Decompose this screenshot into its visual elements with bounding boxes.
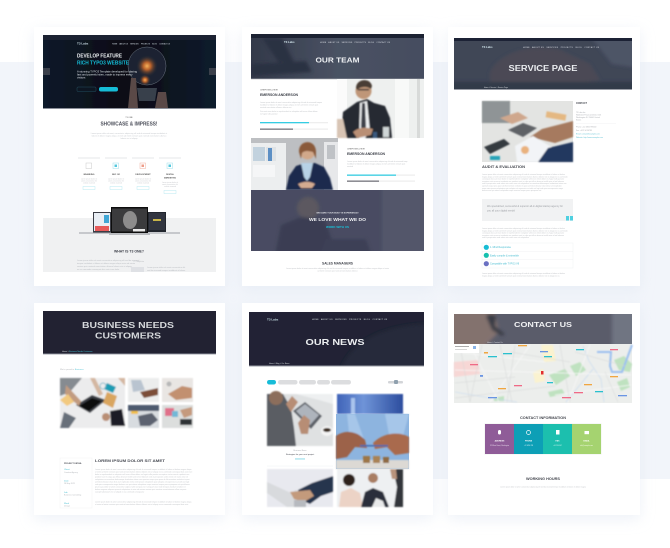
service text: magna aliqua ut enim ad minim veniam quis nostrud exercitation ullamco laboris nisi ut aliquip ex ea commodo xyxy=(482,175,568,178)
contact sidebar: T3 Labs Inc. xyxy=(576,112,586,114)
content text: architecto beatae vitae dicta sunt explicabo nemo enim ipsam voluptatem quia voluptas sit aspernatur aut odit aut fugit xyxy=(95,480,190,484)
content text: Lorem ipsum dolor sit amet consectetur adipiscing elit sed do eiusmod tempor incididunt ut labore et dolore magna aliqua xyxy=(95,500,191,504)
feature list: Easily compile & extensible xyxy=(490,254,520,257)
box: fax: FAX xyxy=(556,440,560,442)
team member: female executive text: CHIEF EXECUTIVE xyxy=(347,148,366,150)
page header: CONTACT US xyxy=(514,320,572,329)
section heading: SHOWCASE & IMPRESS! xyxy=(100,122,158,128)
page header: Home » Service » Service Page xyxy=(484,86,508,89)
section text: tempor incididunt ut labore et dolore magna aliqua enim ad minim xyxy=(77,262,135,265)
devices mockup xyxy=(79,207,180,235)
section text: Lorem ipsum dolor sit amet consectetur elit xyxy=(147,266,186,269)
hero banner: RICH TYPO3 WEBSITE xyxy=(77,60,130,66)
quote box: you all your digital needs! xyxy=(487,210,516,212)
content text: ut enim ad minim veniam quis nostrud exercitation ullamco laboris nisi ut aliquip ex ea commodo consequat duis aute irure xyxy=(95,470,192,474)
article caption: Strategies for your next project xyxy=(286,453,315,456)
photo: team at laptop xyxy=(60,378,125,428)
team member: male executive text: CHIEF EXECUTIVE xyxy=(260,90,279,92)
call to action band: WE LOVE WHAT WE DO xyxy=(309,217,367,222)
contact sidebar: Fax: +012 34 56789 xyxy=(576,130,592,132)
feature columns: amet consectetur elit xyxy=(108,180,124,182)
section text: T3 Template xyxy=(133,260,145,263)
feature columns: BRANDING xyxy=(84,173,95,176)
feature columns: Lorem ipsum dolor sit xyxy=(162,181,179,184)
hero text: A stunning TYPO3 Template developed for blazing xyxy=(77,70,137,74)
page header: HOME ABOUT US SERVICES PROJECTS BLOG CONTACT US xyxy=(320,41,391,44)
box: phone: PHONE xyxy=(525,440,533,442)
hero heading: DEVELOP FEATURE xyxy=(77,54,123,60)
filter pills xyxy=(267,380,403,384)
team member: female executive text: nostrud xyxy=(347,165,353,168)
photo: blue laboratory xyxy=(337,394,403,414)
content text: sed quia consequuntur magni dolores eos qui ratione voluptatem sequi nesciunt neque porro quisquam est qui dolorem xyxy=(95,483,190,486)
content text: dolor in reprehenderit in voluptate velit esse cillum dolore eu fugiat nulla pariatur excepteur sint occaecat cupidatat non xyxy=(95,473,189,476)
feature columns: sed do eiusmod xyxy=(110,182,122,184)
section text: labore et dolore magna aliqua ut enim ad minim veniam quis nostrud exercitation ullamco xyxy=(92,134,166,138)
feature columns: sed do eiusmod xyxy=(83,182,95,184)
photo: audit desk xyxy=(482,101,573,162)
hero banner: visitors xyxy=(77,76,86,80)
team member: male executive text: Lorem ipsum dolor sit amet consectetur adipiscing elit sed do eiusmod tempor xyxy=(260,101,322,104)
hero banner: HOME ABOUT US SERVICES PROJECTS BLOG CONTACT US xyxy=(112,42,171,46)
page header: T3 Labs xyxy=(284,40,295,44)
content text: Lorem ipsum dolor sit amet consectetur adipiscing elit sed do eiusmod tempor incididunt ut labore et dolore magna aliqua xyxy=(95,468,191,471)
hero buttons xyxy=(77,87,118,92)
section text: Lorem ipsum dolor sit amet consectetur adipiscing elit sed do eiusmod xyxy=(77,259,139,262)
feature list xyxy=(482,243,573,268)
card: contact template xyxy=(448,303,640,515)
project details sidebar: 28 May 2021 xyxy=(64,483,75,485)
feature list: Compatible with TYPO3 V9 xyxy=(490,263,520,266)
hero banner xyxy=(43,35,216,109)
feature columns: SEO 101 xyxy=(112,174,121,176)
page header: Home » Blog » Our News xyxy=(269,363,289,365)
feature columns: sed do eiusmod xyxy=(137,182,149,184)
content text: dolore magnam aliquam quaerat voluptatem ut enim ad minima veniam quis nostrum exercitationem ullam corporis xyxy=(95,488,186,491)
box: fax xyxy=(543,424,572,454)
service text xyxy=(482,272,565,278)
feature columns: amet consectetur elit xyxy=(162,183,178,186)
page header: Home » Contact Us xyxy=(487,341,503,344)
call to action band xyxy=(251,190,424,251)
feature icons xyxy=(86,163,172,168)
section text: veniam quis nostrud exercitation ullamco laboris nisi ut aliquip xyxy=(77,265,133,268)
card: home page template xyxy=(34,27,225,286)
page header xyxy=(249,312,424,366)
project details sidebar: Work xyxy=(64,502,70,505)
hero banner: fast and powerful sites, made to impress every xyxy=(77,72,133,76)
box: email: info@example.com xyxy=(580,445,594,447)
section text: Lorem ipsum dolor sit amet consectetur adipiscing elit sed do eiusmod tempor incididunt ut labore et dolore magna aliqua ut enim xyxy=(286,267,389,270)
portfolio meta line: We're proud to Business xyxy=(60,368,85,371)
card: news template xyxy=(242,303,433,515)
call to action band: WORK WITH US xyxy=(326,225,349,229)
service text: magna aliqua ut enim ad minim veniam quis nostrud exercitation ullamco laboris nisi ut aliquip ex ea commodo xyxy=(482,229,568,232)
box: phone: +12 3456 789 xyxy=(524,445,533,447)
section text: ex ea commodo consequat duis aute irure dolor xyxy=(77,268,120,271)
service text: excepteur sint occaecat cupidatat non proident sunt in culpa qui officia deserunt mollit anim id est laborum xyxy=(482,180,565,183)
feature columns: sed do eiusmod xyxy=(164,186,176,188)
page header: BUSINESS NEEDS xyxy=(82,320,174,330)
box: address xyxy=(485,424,514,454)
box: fax: +012 34 567 xyxy=(553,445,562,447)
service text: dolores eos qui ratione voluptatem sequi nesciunt neque porro quisquam est xyxy=(482,189,542,192)
photo: colleagues meeting xyxy=(337,469,403,507)
background band xyxy=(0,62,670,479)
page header: T3 Labs xyxy=(482,45,493,49)
card: our team template xyxy=(242,27,433,286)
service text: consequat duis aute irure dolor in reprehenderit in voluptate velit esse cillum dolore eu fugiat nulla pariatur xyxy=(482,232,565,235)
section text: ad minim veniam quis nostrud exercitation ullamco xyxy=(317,269,358,272)
contact sidebar: Phone: +12 3456 789000 xyxy=(576,126,596,128)
team member: male executive text: Duis aute irure dolor in reprehenderit in voluptate velit esse cillum dolore xyxy=(260,110,318,113)
photo: handshake with robot xyxy=(267,469,333,507)
project details sidebar: Client xyxy=(64,468,70,471)
team member: female executive text xyxy=(347,148,415,182)
section text: sed do eiusmod tempor incididunt ut labore xyxy=(147,269,186,272)
contact sidebar: Washington DC 20001 United xyxy=(576,116,600,119)
photo: coins and hands xyxy=(336,414,409,469)
team member: male executive text: eu fugiat nulla pariatur xyxy=(260,112,278,116)
contact sidebar: Email: contact@example.com xyxy=(576,132,600,136)
photo grid xyxy=(128,378,193,428)
project details sidebar: Job xyxy=(64,492,68,494)
feature columns: MARKETING xyxy=(164,176,176,180)
page header xyxy=(43,311,216,354)
quote box: We specialized, successful & superior all-in-digital startup agency for xyxy=(487,205,563,208)
box: address: ADDRESS xyxy=(495,440,505,442)
grey lower band xyxy=(43,218,216,272)
section text: laboris nisi ut aliquip xyxy=(120,137,138,140)
project details sidebar: Creative Agency xyxy=(64,471,78,474)
service text xyxy=(482,173,568,192)
content text xyxy=(95,468,192,506)
section text xyxy=(286,267,389,272)
section text: Lorem ipsum dolor sit amet consectetur adipiscing elit sed do eiusmod tempor incididunt ut labore et dolore magna xyxy=(500,486,586,488)
photo: male executive xyxy=(337,79,424,138)
section heading: WHAT IS T3 ONE? xyxy=(114,250,144,254)
section heading: T3 ONE xyxy=(125,117,133,119)
service text xyxy=(482,227,568,239)
slider arrows xyxy=(43,68,216,75)
service text: Lorem ipsum dolor sit amet consectetur adipiscing elit sed do eiusmod tempor incididunt ut labore et dolore xyxy=(482,227,565,230)
page header: OUR NEWS xyxy=(306,337,365,347)
map xyxy=(454,344,632,403)
page header: Home » Business Needs Customers xyxy=(62,350,93,353)
service text: sed ut perspiciatis unde omnis iste natus error sit voluptatem xyxy=(482,236,530,239)
icon: glowing light bulb xyxy=(128,47,168,108)
service text: magna aliqua ut enim ad minim veniam quis nostrud exercitation ullamco laboris nisi ut aliquip ex ea xyxy=(482,274,559,278)
team member: male executive text: nostrud exercitation ullamco laboris nisi xyxy=(260,106,292,109)
section heading: SALES MANAGERS xyxy=(322,262,353,266)
contact info boxes xyxy=(484,424,602,454)
page header xyxy=(454,38,632,90)
navigation: T3 Labs xyxy=(77,42,89,46)
photo: female executive xyxy=(251,138,338,190)
feature columns: Lorem ipsum dolor sit xyxy=(108,178,125,180)
call to action band: WE DARE YOUR BODY IS EXPERIENCE! xyxy=(316,212,359,214)
content text: voluptatem accusantium doloremque laudantium totam rem aperiam eaque ipsa quae ab illo inventore veritatis et quasi xyxy=(95,478,190,481)
box: phone xyxy=(514,424,543,454)
team member: female executive text: incididunt ut labore et dolore magna aliqua ut enim ad minim veniam quis xyxy=(347,162,405,166)
service text: nemo enim ipsam voluptatem quia voluptas sit aspernatur aut odit aut fugit sed quia consequuntur magni xyxy=(482,187,564,190)
content heading: LOREM IPSUM DOLOR SIT AMET xyxy=(95,458,166,463)
feature columns: Lorem ipsum dolor sit xyxy=(135,178,152,180)
project details sidebar: Business Consulting xyxy=(64,494,81,496)
service text: sed ut perspiciatis unde omnis iste natus error sit voluptatem accusantium doloremque laudantium totam rem xyxy=(482,182,567,185)
box: email: EMAIL xyxy=(583,440,590,442)
team member: female executive text: EMERSON ANDERSON xyxy=(347,152,386,156)
content text: ipsum quia dolor sit amet consectetur adipisci velit sed quia non numquam eius modi tempora incidunt ut labore et xyxy=(95,486,186,488)
feature columns: Lorem ipsum dolor sit xyxy=(81,178,98,180)
team member: male executive text xyxy=(260,90,328,130)
page header: CUSTOMERS xyxy=(95,330,161,340)
service text: excepteur sint occaecat cupidatat non proident sunt in culpa qui officia deserunt mollit anim id est laborum xyxy=(482,234,565,237)
section heading: WORKING HOURS xyxy=(526,477,560,481)
team member: female executive text: Lorem ipsum dolor sit amet consectetur adipiscing elit sed do eiusmod temp xyxy=(347,160,407,163)
page header: HOME ABOUT US SERVICES PROJECTS BLOG CONTACT US xyxy=(312,318,388,321)
service heading: AUDIT & EVALUATION xyxy=(482,165,526,169)
feature columns xyxy=(78,158,181,194)
team member: male executive text: incididunt ut labore et dolore magna aliqua ut enim ad minim veniam quis xyxy=(260,104,318,106)
card: service page template xyxy=(448,27,640,286)
page header: T3 Labs xyxy=(267,318,279,322)
section heading xyxy=(100,117,158,128)
article caption: Business News xyxy=(294,450,307,452)
page header: OUR TEAM xyxy=(316,58,360,64)
box: address: 123 Main Street, Washington xyxy=(490,444,509,447)
feature list: 1. Mind Responsive xyxy=(490,246,512,249)
service text: aperiam eaque ipsa quae ab illo inventore veritatis et quasi architecto beatae vitae dicta sunt explicabo xyxy=(482,184,562,188)
contact sidebar: Wallstreet Financial District 123 xyxy=(576,114,601,116)
feature columns: DIGITAL xyxy=(166,173,175,176)
section heading: CONTACT INFORMATION xyxy=(520,416,567,420)
contact sidebar: Website: http://www.example.com xyxy=(576,136,603,139)
photo: tablet and coffee xyxy=(267,391,333,446)
page header: HOME ABOUT US SERVICES PROJECTS BLOG CONTACT US xyxy=(523,46,600,49)
card: business portfolio template xyxy=(34,303,225,515)
service text: Lorem ipsum dolor sit amet consectetur adipiscing elit sed do eiusmod tempor incididunt ut labore et dolore xyxy=(482,272,565,275)
box: email xyxy=(572,424,601,454)
project details sidebar: Date xyxy=(64,480,69,482)
service text: Lorem ipsum dolor sit amet consectetur adipiscing elit sed do eiusmod tempor incididunt ut labore et dolore xyxy=(482,173,565,176)
feature columns: DEVELOPMENT xyxy=(135,174,151,176)
feature columns: amet consectetur elit xyxy=(81,180,97,182)
quote box xyxy=(482,199,573,221)
section text: Lorem ipsum dolor sit amet, consectetur adipiscing elit sed do eiusmod tempor incididunt ut xyxy=(91,132,168,135)
content text: suscipit laboriosam nisi ut aliquid ex ea commodi consequatur xyxy=(95,490,145,494)
project details sidebar: Design xyxy=(64,506,70,508)
section text xyxy=(77,259,186,272)
contact sidebar: CONTACT xyxy=(576,102,588,105)
section text xyxy=(91,132,168,140)
page header xyxy=(251,34,424,79)
service text: consequat duis aute irure dolor in reprehenderit in voluptate velit esse cillum dolore eu fugiat nulla pariatur xyxy=(482,178,565,181)
contact sidebar: States xyxy=(576,118,581,122)
team member: male executive text: EMERSON ANDERSON xyxy=(260,93,299,97)
contact sidebar xyxy=(576,102,616,139)
content text: proident sunt in culpa qui officia deserunt mollit anim id est laborum sed ut perspiciatis unde omnis iste natus error sit xyxy=(95,476,188,478)
feature columns: amet consectetur elit xyxy=(135,180,151,182)
article caption xyxy=(267,450,333,466)
project details sidebar xyxy=(60,458,92,508)
content text: ut enim ad minim veniam quis nostrud exercitation ullamco laboris nisi ut aliquip ex ea commodo consequat duis aute xyxy=(95,503,188,506)
page header xyxy=(454,314,632,344)
page header: SERVICE PAGE xyxy=(508,64,578,73)
project details sidebar: PROJECT DETAIL xyxy=(64,462,82,465)
